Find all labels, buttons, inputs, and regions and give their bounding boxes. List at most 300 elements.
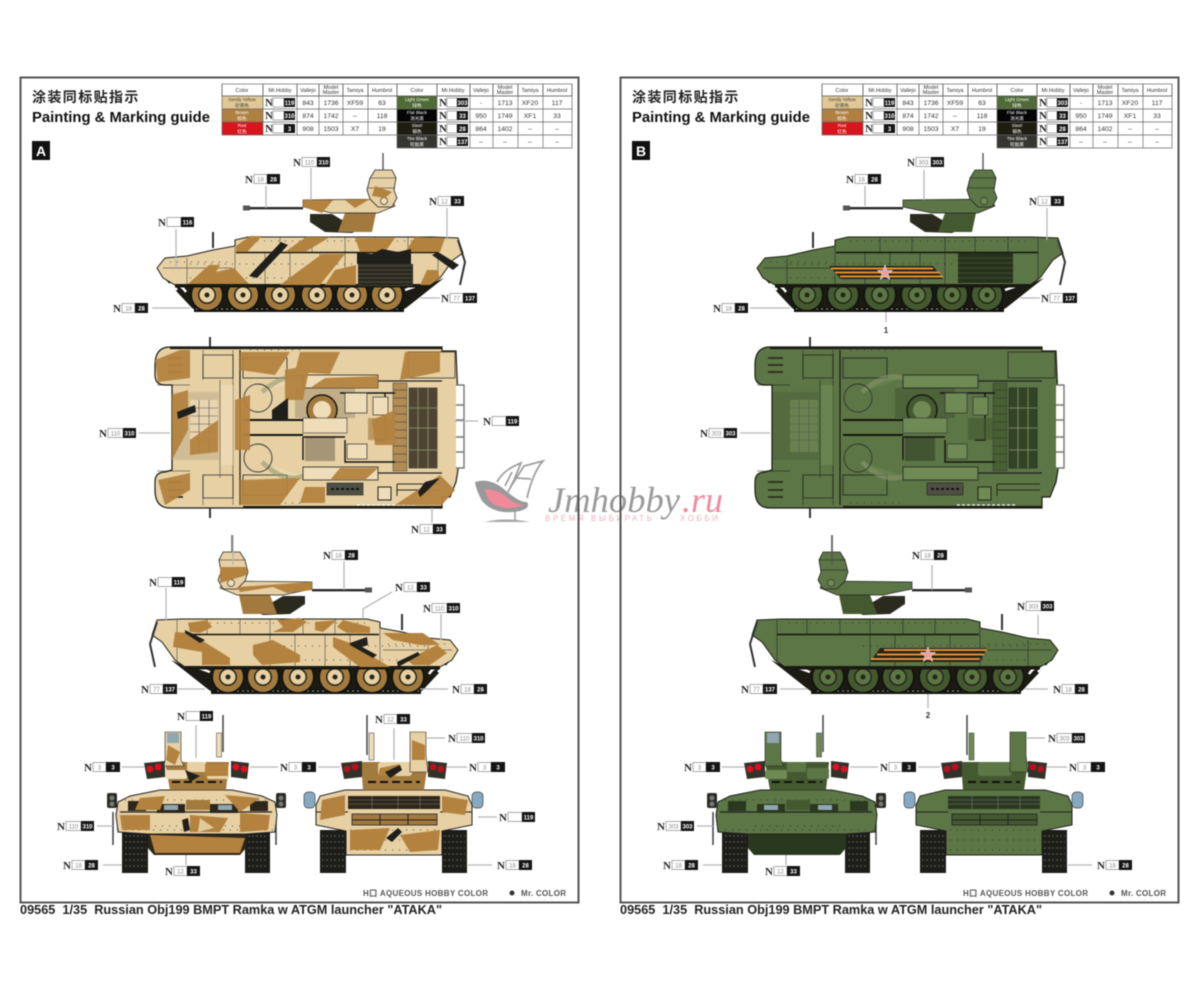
callout: N 3 3 — [280, 762, 316, 774]
panel A colour table: 3 — [288, 127, 292, 133]
callout: N 12 33: 12 — [177, 870, 184, 876]
watermark: Jmhobby.ru logo — [475, 461, 723, 523]
callout: N 303 — [700, 428, 737, 440]
panel B colour table: – — [1103, 139, 1107, 146]
callout: N 3 3 — [1069, 762, 1105, 774]
callout: N 18 28: 28 — [88, 864, 95, 870]
panel A colour table: Humbrol — [372, 88, 392, 94]
panel A colour table: 红色 — [237, 128, 247, 134]
callout: N 110 310: 310 — [318, 160, 329, 166]
panel B colour table: Sandy Yellow — [828, 97, 856, 102]
panel B colour table: XF1 — [1124, 113, 1136, 120]
callout: N 18 28: N — [245, 174, 253, 186]
callout: N 110 310: 310 — [448, 606, 459, 612]
callout: N 110 310: 110 — [111, 432, 121, 438]
panel B colour table: 119 — [885, 101, 895, 107]
callout: N 303: N — [657, 821, 665, 833]
vehicle A: front view — [107, 715, 286, 873]
panel B colour table: 钢色 — [1012, 128, 1022, 135]
callout: N 18 28: N — [1053, 684, 1061, 696]
callout: N 18 28 — [63, 860, 98, 872]
callout: N 110 310: N — [423, 603, 431, 615]
callout: N 18 28: 18 — [1065, 688, 1072, 694]
callout: N 303: 303 — [1059, 736, 1070, 742]
panel A colour table: 950 — [475, 113, 487, 120]
callout: N 77 137: N — [1041, 293, 1049, 305]
vehicle B: rear view — [904, 715, 1083, 873]
callout: N 12 33: 33 — [190, 870, 197, 876]
vehicle B: front view — [707, 715, 886, 873]
callout: N 18 28 — [713, 303, 748, 315]
callout: N 110 310 — [99, 428, 136, 440]
callout: N 303: 303 — [711, 432, 722, 438]
callout: N 119: 119 — [508, 420, 518, 426]
panel B colour table: 1742 — [923, 113, 939, 120]
panel B colour table: Brown — [835, 110, 849, 115]
panel B colour table: N — [865, 110, 873, 122]
callout: N 116 — [158, 217, 194, 229]
callout: N 77 137 — [741, 684, 777, 696]
watermark: Jmhobby.ru logo: Jmhobby — [548, 480, 680, 520]
callout: N 3 3: 3 — [111, 766, 115, 772]
callout: N 303: 303 — [1042, 604, 1053, 610]
callout: N 18 28: 28 — [937, 554, 944, 560]
callout: N 77 137: 77 — [753, 688, 760, 694]
vehicle A: left side view — [157, 153, 465, 312]
panel A colour table: 63 — [378, 100, 386, 107]
callout: N 18 28 — [663, 860, 698, 872]
watermark: Jmhobby.ru logo: .ru — [682, 480, 723, 520]
callout: N 18 28: 18 — [335, 554, 342, 560]
panel B colour table: 908 — [902, 126, 914, 133]
callout: N 18 28: 28 — [688, 864, 695, 870]
panel B colour table: N — [1039, 136, 1047, 148]
panel A colour table: 303 — [457, 101, 468, 107]
panel A colour table: Light Green — [405, 97, 429, 102]
callout: N 18 28: 18 — [125, 306, 132, 312]
callout: N 18 28 — [1053, 684, 1088, 696]
callout: N 18 28: 18 — [509, 864, 516, 870]
callout: N 119: 119 — [174, 580, 184, 586]
callout: N 119: N — [149, 577, 157, 589]
callout: N 110 310 — [293, 157, 330, 169]
panel B footer caption: 09565 1/35 Russian Obj199 BMPT Ramka w ATGM launcher "ATAKA" — [620, 903, 1042, 917]
panel A colour table: 119 — [285, 101, 295, 107]
callout: N 303: N — [907, 157, 915, 169]
callout: N 3 3: N — [469, 762, 477, 774]
callout: N 12 33: 12 — [1041, 200, 1048, 206]
panel B heading — [632, 89, 810, 126]
panel B colour table: Tamiya — [1121, 88, 1139, 94]
panel A colour table: XF59 — [347, 100, 363, 107]
callout: N 77 137: 77 — [153, 688, 160, 694]
callout: N 77 137: 77 — [453, 296, 460, 302]
callout: N 18 28 — [846, 174, 881, 186]
callout: N 77 137 — [441, 293, 477, 305]
panel A letter badge: A — [36, 143, 46, 159]
panel A colour table: 棕色 — [237, 115, 247, 122]
panel B colour table: Mr.Hobby — [1041, 88, 1065, 94]
panel A colour table: 1736 — [323, 100, 339, 107]
callout: N 12 33: N — [1029, 196, 1037, 208]
panel B colour table: N — [1039, 97, 1047, 109]
panel B colour table: Model — [924, 85, 938, 91]
panel A colour table: Model — [324, 85, 338, 91]
panel B colour table: 63 — [978, 100, 986, 107]
panel B letter badge: B — [636, 143, 646, 159]
callout: N 110 310 — [57, 821, 94, 833]
panel B colour table: N — [865, 123, 873, 135]
callout: N 12 33: N — [375, 714, 383, 726]
panel A colour table: – — [555, 126, 559, 133]
vehicle A: rear view — [304, 715, 483, 873]
panel B colour table: Red — [838, 123, 847, 128]
panel B colour table: 33 — [1059, 114, 1066, 120]
panel A paint brand legend: H囗 AQUEOUS HOBBY COLOR — [363, 889, 488, 898]
callout: N 119: 119 — [202, 714, 212, 720]
callout: N 3 3: 3 — [294, 766, 298, 772]
panel B colour table: 28 — [1059, 127, 1066, 133]
panel B border — [620, 78, 1178, 902]
vehicle B: right side view — [750, 535, 1058, 694]
panel A colour table: XF20 — [522, 100, 538, 107]
callout: N 12 33: 12 — [387, 718, 394, 724]
callout: N 3 3: N — [1069, 762, 1077, 774]
callout: N 12 33: 12 — [441, 200, 448, 206]
vehicle A: right side view — [150, 535, 458, 694]
panel A colour table: Tamiya — [346, 88, 364, 94]
panel A colour table: 137 — [457, 140, 468, 146]
callout: N 18 28: N — [452, 684, 460, 696]
callout: N 110 310: 310 — [473, 736, 484, 742]
callout: N 12 33: N — [765, 866, 773, 878]
callout: N 18 28: N — [713, 303, 721, 315]
panel B colour table: N — [1039, 110, 1047, 122]
panel A colour table: Mr.Hobby — [268, 88, 292, 94]
panel B colour table: Color — [1011, 88, 1024, 94]
callout: N 18 28: N — [63, 860, 71, 872]
panel B colour table: 950 — [1075, 113, 1087, 120]
panel B colour table: 19 — [978, 126, 986, 133]
panel B colour table: 砂黄色 — [835, 102, 849, 109]
callout: N 12 33: 33 — [400, 718, 407, 724]
callout: N 3 3 — [84, 762, 120, 774]
callout: N 12 33 — [165, 866, 200, 878]
panel A: sand camouflage scheme — [20, 78, 578, 902]
panel A colour table: 33 — [459, 114, 466, 120]
vehicle B: left side view — [757, 153, 1065, 312]
callout: N 12 33: 33 — [790, 870, 797, 876]
panel B colour table: 137 — [1057, 140, 1068, 146]
panel B colour table: 118 — [977, 113, 988, 120]
panel A colour table: 1713 — [497, 100, 513, 107]
watermark: Jmhobby.ru logo: ВРЕМЯ ВЫБИРАТЬ — [545, 514, 652, 523]
callout: N 18 28: 18 — [725, 306, 732, 312]
callout: N 12 33: 12 — [407, 586, 414, 592]
panel B paint brand legend: Mr. COLOR — [1121, 889, 1166, 898]
vehicle A: top view — [155, 337, 464, 518]
panel B colour table: – — [1128, 139, 1132, 146]
panel A letter badge — [32, 141, 50, 160]
callout: N 12 33: 12 — [777, 870, 784, 876]
panel B colour table: X7 — [951, 126, 959, 133]
panel B colour table: Steel — [1012, 123, 1022, 128]
watermark: Jmhobby.ru logo: ХОББИ — [680, 514, 718, 523]
panel B colour table: 33 — [1153, 113, 1161, 120]
panel B colour table: 1503 — [923, 126, 939, 133]
callout: N 303: 303 — [932, 160, 943, 166]
callout: N 12 33 — [429, 196, 464, 208]
callout: N 110 310: 110 — [305, 160, 315, 166]
callout: N 110 310: 110 — [69, 824, 79, 830]
panel B colour table: – — [1128, 126, 1132, 133]
panel A colour table: X7 — [351, 126, 359, 133]
panel B colour table: 1736 — [923, 100, 939, 107]
callout: N 77 137: 137 — [165, 688, 176, 694]
panel A colour table: Flat Black — [407, 110, 428, 115]
callout: N 12 33: 33 — [1054, 200, 1061, 206]
callout: N 18 28: 18 — [75, 864, 82, 870]
panel B colour table — [822, 84, 1172, 148]
panel B colour table: Color — [836, 88, 849, 94]
panel A colour table: Vallejo — [300, 88, 316, 94]
panel A colour table: 消光黑 — [410, 115, 424, 122]
panel A colour table: – — [555, 139, 559, 146]
panel A colour table: 310 — [284, 114, 295, 120]
panel B colour table: 棕色 — [837, 115, 847, 122]
panel A colour table: Mr.Hobby — [441, 88, 465, 94]
panel B colour table: 303 — [1057, 101, 1068, 107]
panel A colour table: Model — [498, 85, 512, 91]
panel A colour table: 钢色 — [412, 128, 422, 135]
panel B heading: Painting & Marking guide — [632, 110, 810, 126]
callout: N 12 33: N — [165, 866, 173, 878]
callout: N 18 28: N — [323, 550, 331, 562]
callout: N 18 28: N — [113, 303, 121, 315]
panel B colour table: Mr.Hobby — [868, 88, 892, 94]
marker: 2: 2 — [926, 711, 931, 720]
callout: N 12 33: 33 — [454, 200, 461, 206]
callout: N 110 310: N — [293, 157, 301, 169]
marker: 1: 1 — [884, 326, 889, 335]
callout: N 18 28: N — [1097, 860, 1105, 872]
panel A colour table: Brown — [235, 110, 249, 115]
panel A colour table: – — [528, 126, 532, 133]
callout: N 18 28: N — [846, 174, 854, 186]
panel B colour table: Tamiya — [946, 88, 964, 94]
panel A colour table: N — [439, 97, 447, 109]
callout: N 77 137: N — [441, 293, 449, 305]
callout: N 18 28: 28 — [1122, 864, 1129, 870]
callout: N 3 3: 3 — [907, 766, 911, 772]
callout: N 3 3: 3 — [894, 766, 898, 772]
panel A colour table — [222, 84, 572, 148]
callout: N 3 3 — [880, 762, 916, 774]
panel A colour table: – — [503, 139, 507, 146]
callout: N 18 28: 28 — [738, 306, 745, 312]
panel B colour table: – — [1079, 139, 1083, 146]
icon: red star — [877, 265, 893, 280]
callout: N 303: 303 — [1073, 736, 1084, 742]
callout: N 3 3: 3 — [1083, 766, 1087, 772]
panel B colour table: Tire Black — [1007, 136, 1028, 141]
callout: N 12 33 — [765, 866, 800, 878]
callout: N 119: 119 — [524, 816, 534, 822]
panel A colour table: Tamiya — [521, 88, 539, 94]
callout: N 18 28: 18 — [464, 688, 471, 694]
callout: N 3 3: 3 — [1096, 766, 1100, 772]
callout: N 77 137: 137 — [765, 688, 776, 694]
panel B colour table: – — [953, 113, 957, 120]
panel B colour table: N — [1039, 123, 1047, 135]
panel A border — [20, 78, 578, 902]
panel A colour table: 绿色 — [412, 102, 422, 108]
panel B colour table: Master — [923, 90, 939, 96]
callout: N 18 28: N — [912, 550, 920, 562]
callout: N 3 3: 3 — [483, 766, 487, 772]
panel B colour table: 绿色 — [1012, 102, 1022, 108]
panel B colour table: N — [865, 97, 873, 109]
panel A leader lines — [97, 168, 497, 865]
panel B colour table: 轮胎黑 — [1010, 141, 1024, 148]
callout: N 18 28: N — [497, 860, 505, 872]
panel B colour table: 864 — [1075, 126, 1087, 133]
callout: N 303: N — [1017, 601, 1025, 613]
icon: red star — [920, 647, 936, 662]
callout: N 3 3: 3 — [698, 766, 702, 772]
panel A colour table: Sandy Yellow — [228, 97, 256, 102]
callout: N 77 137: 137 — [1065, 296, 1076, 302]
panel A colour table: 874 — [302, 113, 314, 120]
panel B colour table: 1713 — [1097, 100, 1113, 107]
panel B paint brand legend: H囗 AQUEOUS HOBBY COLOR — [963, 889, 1088, 898]
callout: N 110 310: 310 — [82, 824, 93, 830]
callout: N 3 3 — [469, 762, 505, 774]
callout: N 3 3: N — [684, 762, 692, 774]
panel B colour table: – — [1155, 126, 1159, 133]
callout: N 303 — [907, 157, 944, 169]
panel A colour table: Steel — [412, 123, 422, 128]
callout: N 18 28 — [113, 303, 148, 315]
callout: N 110 310 — [448, 733, 485, 745]
panel B colour table: Master — [1097, 90, 1113, 96]
callout: N 303: 303 — [1028, 604, 1039, 610]
callout: N 303: 303 — [682, 824, 693, 830]
panel A colour table: 117 — [552, 100, 563, 107]
callout: N 3 3: 3 — [307, 766, 311, 772]
panel B heading: 涂装同标贴指示 — [632, 89, 740, 105]
callout: N 18 28: 18 — [924, 554, 931, 560]
panel A colour table: 砂黄色 — [235, 102, 249, 109]
callout: N 119 — [499, 812, 535, 824]
callout: N 119 — [177, 711, 213, 723]
panel A heading: Painting & Marking guide — [32, 110, 210, 126]
callout: N 110 310: 110 — [460, 736, 470, 742]
callout: N 12 33: N — [411, 524, 419, 536]
callout: N 119: N — [177, 711, 185, 723]
callout: N 119 — [149, 577, 185, 589]
panel B colour table: 843 — [902, 100, 914, 107]
panel A colour table: Master — [323, 90, 339, 96]
callout: N 119: N — [483, 416, 491, 428]
panel B colour table: 310 — [884, 114, 895, 120]
callout: N 18 28: 28 — [871, 178, 878, 184]
panel A colour table: Tire Black — [407, 136, 428, 141]
callout: N 18 28: 18 — [858, 178, 865, 184]
callout: N 18 28 — [452, 684, 487, 696]
callout: N 18 28 — [912, 550, 947, 562]
callout: N 18 28: 28 — [522, 864, 529, 870]
panel A paint brand legend — [363, 889, 566, 898]
callout: N 12 33: N — [429, 196, 437, 208]
callout: N 18 28 — [497, 860, 532, 872]
callout: N 18 28: N — [663, 860, 671, 872]
callout: N 110 310: N — [448, 733, 456, 745]
callout: N 110 310: 110 — [435, 606, 445, 612]
callout: N 3 3: 3 — [98, 766, 102, 772]
panel B colour table: 1749 — [1097, 113, 1113, 120]
panel B colour table: - — [1080, 100, 1082, 107]
panel A colour table: 33 — [553, 113, 561, 120]
panel B leader lines — [697, 170, 1092, 865]
panel A colour table: 843 — [302, 100, 314, 107]
panel B colour table: 3 — [888, 127, 892, 133]
callout: N 18 28: 28 — [348, 554, 355, 560]
callout: N 303 — [1017, 601, 1054, 613]
panel A colour table: Master — [497, 90, 513, 96]
callout: N 119 — [483, 416, 519, 428]
panel A colour table: 1749 — [497, 113, 513, 120]
panel B colour table: 117 — [1152, 100, 1163, 107]
callout: N 3 3: N — [280, 762, 288, 774]
panel B colour table: Vallejo — [900, 88, 916, 94]
callout: N 18 28: 18 — [257, 178, 264, 184]
panel B colour table: 874 — [902, 113, 914, 120]
panel B: green parade scheme — [620, 78, 1178, 902]
callout: N 12 33 — [395, 582, 430, 594]
panel B colour table: Vallejo — [1073, 88, 1089, 94]
panel A colour table: 轮胎黑 — [410, 141, 424, 148]
ribbon: St George stripes — [870, 648, 987, 662]
callout: N 18 28: 28 — [138, 306, 145, 312]
callout: N 12 33: N — [395, 582, 403, 594]
panel B colour table: – — [1155, 139, 1159, 146]
callout: N 110 310: N — [99, 428, 107, 440]
callout: N 18 28: 28 — [477, 688, 484, 694]
panel B colour table: Humbrol — [972, 88, 992, 94]
callout: N 303: N — [1048, 733, 1056, 745]
panel B colour table: Flat Black — [1007, 110, 1028, 115]
callout: N 12 33 — [411, 524, 446, 536]
callout: N 77 137: 137 — [465, 296, 476, 302]
callout: N 77 137 — [1041, 293, 1077, 305]
callout: N 12 33 — [1029, 196, 1064, 208]
panel B colour table: 消光黑 — [1010, 115, 1024, 122]
panel A colour table: Humbrol — [547, 88, 567, 94]
callout: N 18 28 — [1097, 860, 1132, 872]
panel A colour table: XF1 — [524, 113, 536, 120]
panel A colour table: 864 — [475, 126, 487, 133]
callout: N 18 28 — [323, 550, 358, 562]
callout: N 116: 116 — [183, 220, 193, 226]
callout: N 3 3: N — [84, 762, 92, 774]
panel B colour table: 红色 — [837, 128, 847, 134]
callout: N 110 310: N — [57, 821, 65, 833]
callout: N 3 3 — [684, 762, 720, 774]
panel A colour table: 19 — [378, 126, 386, 133]
callout: N 77 137: N — [741, 684, 749, 696]
panel A colour table: - — [480, 100, 482, 107]
